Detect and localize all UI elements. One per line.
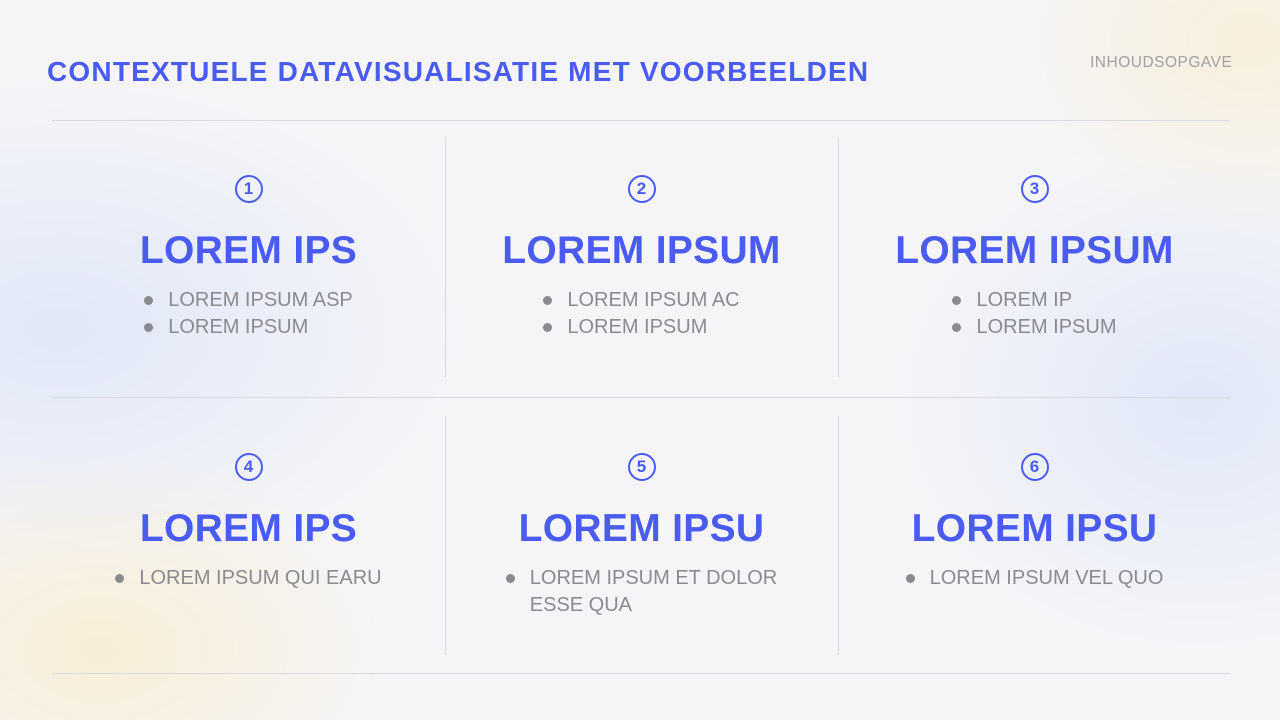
panel: 2: LOREM IPSUM xyxy=(502,229,781,272)
panel: 3: LOREM IPSUM xyxy=(895,229,1174,272)
panel: 5 xyxy=(506,453,777,616)
panel: 4 xyxy=(115,453,382,589)
panel: 1: LOREM IPSUM ASP xyxy=(168,289,353,311)
panel: 1: LOREM IPSUM xyxy=(168,316,308,338)
panel: 3 xyxy=(895,175,1174,338)
label: inhoudsopgave: INHOUDSOPGAVE xyxy=(1090,54,1232,71)
panel: 5: ESSE QUA xyxy=(530,594,632,616)
panel: 6: LOREM IPSU xyxy=(912,507,1157,550)
panel: 3: 3 xyxy=(1030,179,1039,198)
panel: 3: LOREM IPSUM xyxy=(976,316,1117,338)
panel: 6: 6 xyxy=(1030,457,1039,476)
panel: 6 xyxy=(906,453,1163,589)
panel: 4: LOREM IPS xyxy=(140,507,357,550)
panel: 5: 5 xyxy=(637,457,646,476)
title: CONTEXTUELE DATAVISUALISATIE MET VOORBEELDEN xyxy=(47,56,869,87)
panel: 2: 2 xyxy=(637,179,646,198)
panel: 2 xyxy=(502,175,781,338)
panel: 2: LOREM IPSUM AC xyxy=(567,289,740,311)
panel: 2: LOREM IPSUM xyxy=(567,316,707,338)
panel: 4: 4 xyxy=(244,457,253,476)
panel: 1: LOREM IPS xyxy=(140,229,357,272)
panel: 4: LOREM IPSUM QUI EARU xyxy=(139,567,382,589)
panel: 5: LOREM IPSU xyxy=(519,507,764,550)
panel: 5: LOREM IPSUM ET DOLOR xyxy=(530,567,777,589)
panel: 1 xyxy=(140,175,357,338)
panel: 3: LOREM IP xyxy=(976,289,1072,311)
panel: 1: 1 xyxy=(244,179,253,198)
panel: 6: LOREM IPSUM VEL QUO xyxy=(930,567,1163,589)
